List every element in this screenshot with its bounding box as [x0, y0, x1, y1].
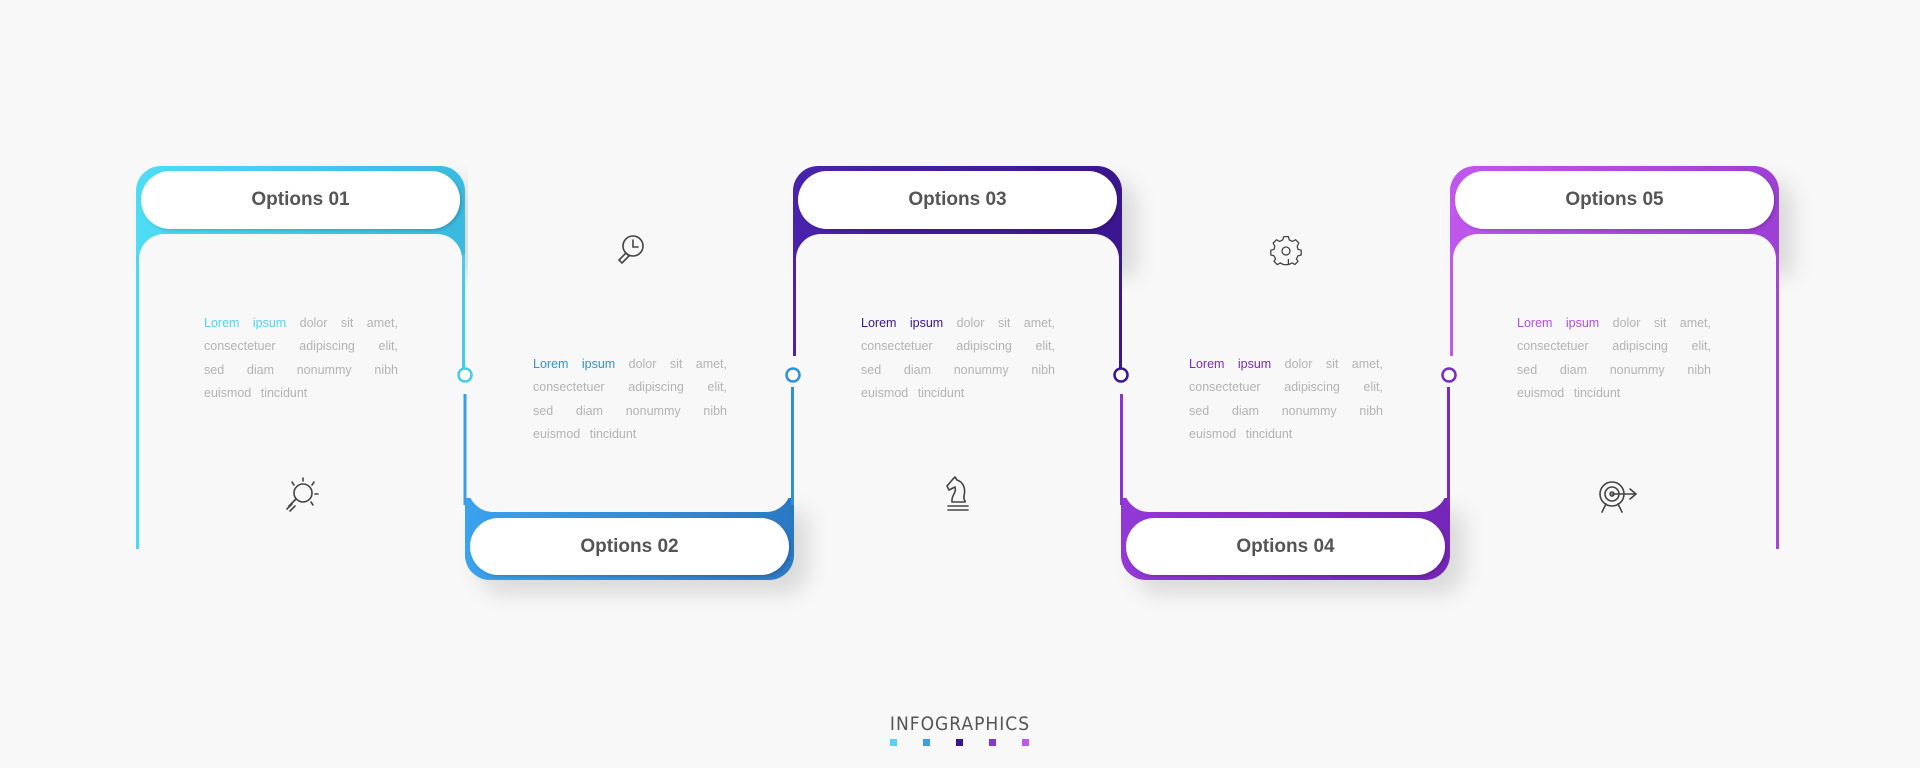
text block 4: consectetuer adipiscing elit,: [1189, 380, 1383, 394]
text block 3: Lorem ipsum dolor sit amet,: [861, 316, 1055, 330]
heading: Options 01: Options 01: [251, 189, 350, 210]
text block 2: sed diam nonummy nibh: [533, 404, 727, 418]
text block 3: consectetuer adipiscing elit,: [861, 339, 1055, 353]
heading: Options 05: Options 05: [1565, 189, 1664, 210]
header pill 05: [1455, 171, 1774, 229]
icon: chess knight: [947, 477, 968, 510]
text block 1: [204, 316, 398, 400]
text block 2: [533, 357, 727, 441]
text block 5: sed diam nonummy nibh: [1517, 363, 1711, 377]
icon: magnifier clock: [619, 236, 643, 263]
text block 5: euismod tincidunt: [1517, 386, 1620, 400]
text block 3: sed diam nonummy nibh: [861, 363, 1055, 377]
footer title: INFOGRAPHICS: [890, 713, 1030, 735]
text block 1: consectetuer adipiscing elit,: [204, 339, 398, 353]
card 5: [1450, 166, 1779, 549]
text block 1: sed diam nonummy nibh: [204, 363, 398, 377]
text block 5: consectetuer adipiscing elit,: [1517, 339, 1711, 353]
icon: gear: [1271, 237, 1301, 265]
card 2: [464, 100, 794, 580]
text block 4: Lorem ipsum dolor sit amet,: [1189, 357, 1383, 371]
text block 4: euismod tincidunt: [1189, 427, 1292, 441]
heading: Options 03: Options 03: [908, 189, 1007, 210]
text block 4: sed diam nonummy nibh: [1189, 404, 1383, 418]
text block 3: [861, 316, 1055, 400]
text block 5: [1517, 316, 1711, 400]
header pill 01: [141, 171, 460, 229]
text block 4: [1189, 357, 1383, 441]
heading: Options 04: Options 04: [1236, 536, 1335, 557]
card 3: [793, 166, 1122, 478]
connector circles: [458, 368, 1456, 382]
text block 2: consectetuer adipiscing elit,: [533, 380, 727, 394]
text block 3: euismod tincidunt: [861, 386, 964, 400]
header pill 04: [1126, 518, 1445, 575]
icon: target: [1600, 482, 1636, 512]
card 4: [1120, 330, 1450, 580]
text block 5: Lorem ipsum dolor sit amet,: [1517, 316, 1711, 330]
header pill 03: [798, 171, 1117, 229]
text block 1: euismod tincidunt: [204, 386, 307, 400]
text block 2: euismod tincidunt: [533, 427, 636, 441]
footer color squares: [890, 739, 1029, 746]
icon: lightbulb: [287, 478, 318, 511]
heading: Options 02: Options 02: [580, 536, 679, 557]
card 1: [136, 166, 465, 634]
text block 1: Lorem ipsum dolor sit amet,: [204, 316, 398, 330]
text block 2: Lorem ipsum dolor sit amet,: [533, 357, 727, 371]
header pill 02: [470, 518, 789, 575]
